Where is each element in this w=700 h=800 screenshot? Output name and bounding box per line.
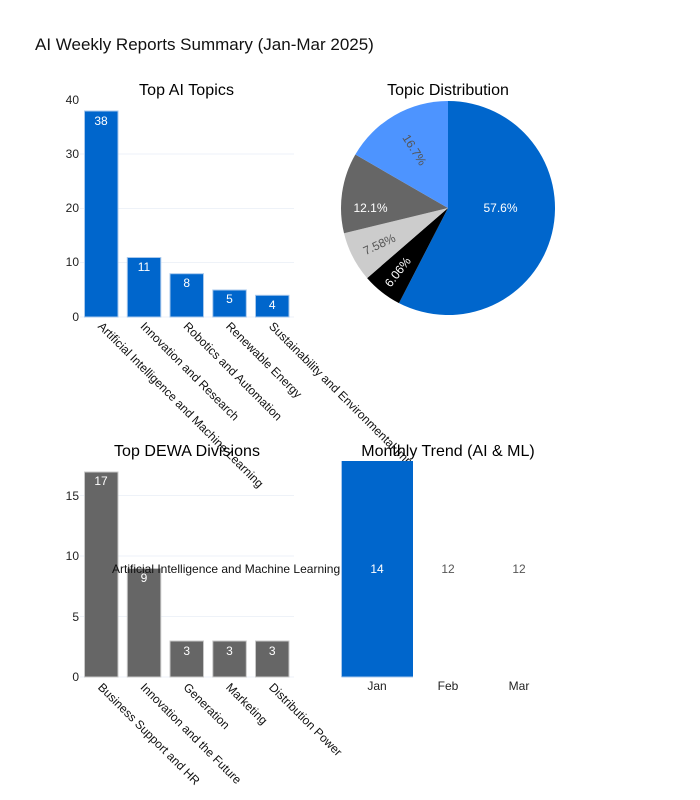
pie chart <box>341 101 555 315</box>
bar values: 38 <box>94 114 108 128</box>
overlapping horizontal label: Artificial Intelligence and Machine Learning <box>112 562 340 576</box>
heading: monthly trend: Monthly Trend (AI & ML) <box>361 443 535 460</box>
bar values: 3 <box>269 644 276 658</box>
y axis labels <box>66 489 79 684</box>
y axis labels: 20 <box>66 201 79 215</box>
category labels: Innovation and the Future <box>138 680 245 787</box>
bar values: 12 <box>441 562 455 576</box>
category labels: Generation <box>181 680 233 732</box>
category labels <box>95 319 427 490</box>
pie labels: 12.1% <box>353 201 388 215</box>
pie labels: 7.58% <box>361 231 398 258</box>
bar values: 3 <box>183 644 190 658</box>
bar values: 14 <box>370 562 384 576</box>
y axis labels: 0 <box>72 310 79 324</box>
category labels: Artificial Intelligence and Machine Learning <box>95 319 266 490</box>
panel: topic distribution <box>341 82 555 315</box>
category labels: Robotics and Automation <box>181 319 285 423</box>
panel: top DEWA divisions <box>66 443 345 788</box>
bar values: 12 <box>512 562 526 576</box>
pie labels <box>353 132 518 290</box>
pie labels: 6.06% <box>382 254 414 290</box>
bars <box>84 111 289 317</box>
y axis labels: 0 <box>72 670 79 684</box>
category labels <box>95 680 345 788</box>
month labels: Mar <box>509 679 529 693</box>
month labels <box>367 679 529 693</box>
heading: topic distribution: Topic Distribution <box>387 82 509 99</box>
month labels: Jan <box>367 679 387 693</box>
month labels: Feb <box>438 679 459 693</box>
y axis labels: 10 <box>66 549 79 563</box>
heading: top DEWA divisions: Top DEWA Divisions <box>114 443 260 460</box>
category labels: Innovation and Research <box>138 319 242 423</box>
pie labels: 16.7% <box>399 132 430 168</box>
y axis labels: 30 <box>66 147 79 161</box>
heading: top AI topics: Top AI Topics <box>139 82 234 99</box>
panel: top AI topics <box>66 82 427 490</box>
bar values: 11 <box>138 260 151 274</box>
y axis labels <box>66 93 79 324</box>
category labels: Sustainability and Environmental Impact <box>266 319 427 481</box>
pie labels: 57.6% <box>483 201 518 215</box>
bar values: 17 <box>94 474 108 488</box>
bar values: 8 <box>183 276 190 290</box>
category labels: Business Support and HR <box>95 680 203 788</box>
bar values: 3 <box>226 644 233 658</box>
y axis labels: 10 <box>66 255 79 269</box>
y axis labels: 40 <box>66 93 79 107</box>
bar values <box>370 562 526 576</box>
y axis labels: 15 <box>66 489 79 503</box>
title: AI Weekly Reports Summary (Jan-Mar 2025) <box>35 35 374 54</box>
category labels: Distribution Power <box>266 680 345 759</box>
bar values <box>94 114 276 312</box>
bar values: 5 <box>226 292 233 306</box>
bar: Jan <box>342 461 413 677</box>
bar values: 4 <box>269 298 276 312</box>
category labels: Renewable Energy <box>223 319 305 401</box>
bar values <box>94 474 276 658</box>
panel: monthly trend <box>112 443 535 693</box>
bars <box>84 472 289 677</box>
category labels: Marketing <box>223 680 270 727</box>
y axis labels: 5 <box>72 610 79 624</box>
bar values: 9 <box>141 571 148 585</box>
